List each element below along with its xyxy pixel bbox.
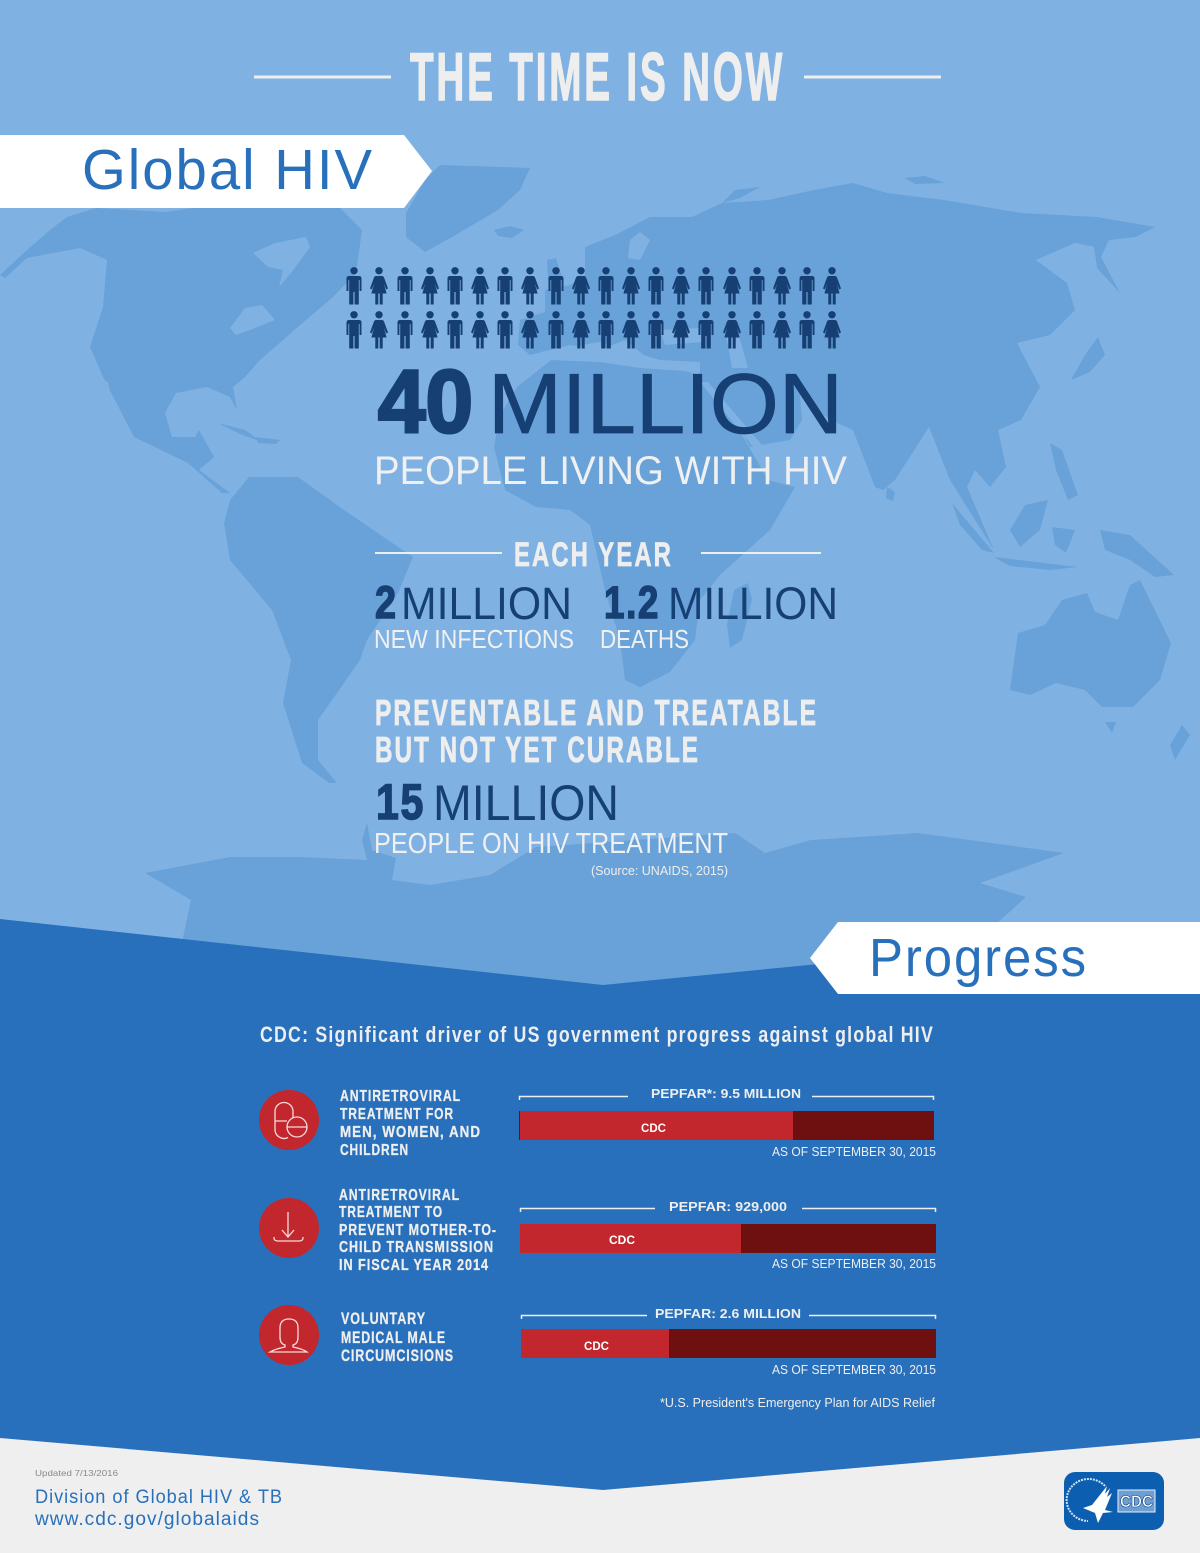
banner: Global HIV: Global HIV [82, 138, 374, 202]
stat: 15 million on treatment: MILLION [433, 775, 619, 831]
footer text: Updated 7/13/2016 [35, 1468, 118, 1478]
each year heading: EACH YEAR [514, 536, 673, 574]
bar: PEPFAR 2.6 million: CDC [584, 1339, 609, 1353]
stat: 15 million on treatment: 15 [376, 774, 425, 830]
label: mother-to-child: IN FISCAL YEAR 2014 [339, 1257, 489, 1274]
blue progress panel [0, 919, 1200, 1553]
stat: 2 million new infections: MILLION [401, 578, 572, 629]
label: antiretroviral treatment: MEN, WOMEN, AND [340, 1124, 481, 1141]
label: mother-to-child: ANTIRETROVIRAL [339, 1187, 460, 1204]
label: circumcisions: VOLUNTARY [341, 1310, 426, 1328]
label: mother-to-child: TREATMENT TO [339, 1204, 443, 1221]
CDC logo [1064, 1472, 1164, 1530]
stat: 1.2 million deaths: 1.2 [604, 577, 660, 628]
preventable statement: BUT NOT YET CURABLE [375, 729, 700, 770]
bar: PEPFAR 929,000: CDC [609, 1233, 635, 1247]
stat: 1.2 million deaths: DEATHS [600, 624, 689, 654]
stat: 40 million: MILLION [488, 357, 843, 452]
progress heading: CDC: Significant driver of US government progress against global HIV [260, 1022, 934, 1047]
banner: Progress [810, 922, 1200, 994]
preventable statement [375, 692, 818, 770]
bar: PEPFAR 9.5 million: PEPFAR*: 9.5 MILLION [651, 1086, 801, 1101]
icon: person [259, 1305, 319, 1365]
CDC logo: CDC [1120, 1492, 1153, 1511]
stat: 2 million new infections: NEW INFECTIONS [374, 624, 574, 654]
stat: 15 million on treatment: PEOPLE ON HIV TREATMENT [374, 828, 728, 860]
bar: PEPFAR 2.6 million [521, 1306, 936, 1377]
stat: 1.2 million deaths [600, 577, 838, 654]
stat: 2 million new infections: 2 [375, 577, 396, 628]
title: THE TIME IS NOW [410, 39, 785, 115]
label: antiretroviral treatment: ANTIRETROVIRAL [340, 1088, 461, 1105]
label: circumcisions: MEDICAL MALE [341, 1329, 446, 1347]
people icons [346, 267, 841, 348]
stat: 2 million new infections [374, 577, 574, 654]
bar: PEPFAR 2.6 million: AS OF SEPTEMBER 30, 2015 [772, 1363, 936, 1377]
people living with HIV: PEOPLE LIVING WITH HIV [374, 449, 847, 493]
banner: Global HIV [0, 135, 432, 208]
label: antiretroviral treatment: CHILDREN [340, 1142, 409, 1159]
map seas [103, 232, 1100, 448]
label: mother-to-child: PREVENT MOTHER-TO- [339, 1222, 497, 1239]
bar: PEPFAR 929,000: AS OF SEPTEMBER 30, 2015 [772, 1257, 936, 1271]
bar: PEPFAR 929,000 [520, 1199, 936, 1271]
preventable statement: PREVENTABLE AND TREATABLE [375, 692, 818, 733]
bar: PEPFAR 9.5 million: AS OF SEPTEMBER 30, 2015 [772, 1145, 936, 1159]
label: circumcisions: CIRCUMCISIONS [341, 1347, 454, 1365]
footer text: www.cdc.gov/globalaids [34, 1509, 260, 1530]
footer text [34, 1468, 283, 1530]
bar: PEPFAR 9.5 million: CDC [641, 1121, 666, 1135]
banner: Progress: Progress [869, 928, 1088, 988]
label: mother-to-child: CHILD TRANSMISSION [339, 1239, 494, 1256]
icon: pills [259, 1090, 319, 1150]
stat: 40 million: 40 [378, 351, 473, 451]
bar: PEPFAR 929,000: PEPFAR: 929,000 [669, 1199, 787, 1214]
world map [0, 165, 1190, 1000]
title [254, 39, 941, 115]
source note: (Source: UNAIDS, 2015) [591, 864, 728, 878]
stat: 1.2 million deaths: MILLION [668, 578, 838, 629]
footer band [0, 1438, 1200, 1553]
label: antiretroviral treatment: TREATMENT FOR [340, 1106, 454, 1123]
stat: 15 million on treatment [374, 774, 728, 860]
footnote: *U.S. President's Emergency Plan for AIDS Relief [660, 1396, 936, 1410]
label: mother-to-child [339, 1187, 497, 1274]
stat: 40 million [378, 351, 843, 452]
bar: PEPFAR 9.5 million [519, 1086, 936, 1159]
icon: mother-to-child arrow [259, 1198, 319, 1258]
bar: PEPFAR 2.6 million: PEPFAR: 2.6 MILLION [655, 1306, 801, 1321]
label: circumcisions [341, 1310, 454, 1365]
label: antiretroviral treatment [340, 1088, 481, 1159]
footer text: Division of Global HIV & TB [35, 1487, 283, 1508]
